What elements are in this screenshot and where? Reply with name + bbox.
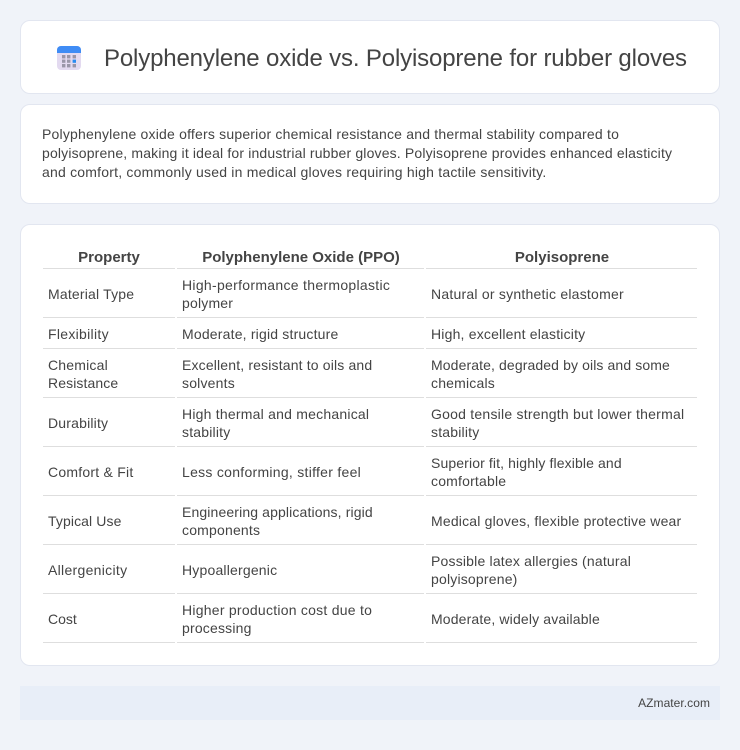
row: Material Type: polymer <box>182 295 233 311</box>
row: Chemical Resistance: Moderate, degraded by oils and some <box>431 357 670 373</box>
table header: Polyisoprene <box>515 249 609 266</box>
row: Typical Use <box>48 504 681 538</box>
row: Chemical Resistance: chemicals <box>431 375 495 391</box>
row: Flexibility: Flexibility <box>48 326 109 342</box>
row: Material Type <box>48 277 624 311</box>
row: Flexibility <box>48 326 586 342</box>
row: Typical Use: Engineering applications, rigid <box>182 504 373 520</box>
row: Durability: stability <box>431 424 479 440</box>
row: Durability: High thermal and mechanical <box>182 406 369 422</box>
row: Durability: stability <box>182 424 230 440</box>
row: Comfort & Fit: Superior fit, highly flexible and <box>431 455 622 471</box>
title: Polyphenylene oxide vs. Polyisoprene for rubber gloves <box>104 45 687 72</box>
row: Allergenicity: Allergenicity <box>48 562 127 578</box>
row: Chemical Resistance: Chemical <box>48 357 108 373</box>
row: Durability: Good tensile strength but lower thermal <box>431 406 684 422</box>
row: Chemical Resistance <box>48 357 670 391</box>
table header <box>78 249 609 266</box>
row: Comfort & Fit: comfortable <box>431 473 506 489</box>
intro text: polyisoprene, making it ideal for industrial rubber gloves. Polyisoprene provides enhanced elasticity <box>42 145 672 161</box>
row: Durability: Durability <box>48 415 108 431</box>
row: Material Type: High-performance thermoplastic <box>182 277 390 293</box>
footer bar <box>20 686 720 720</box>
intro text: Polyphenylene oxide offers superior chemical resistance and thermal stability compared to <box>42 126 619 142</box>
row: Material Type: Material Type <box>48 286 134 302</box>
intro text <box>42 126 672 180</box>
row: Allergenicity: polyisoprene) <box>431 571 518 587</box>
row: Chemical Resistance: Resistance <box>48 375 118 391</box>
row: Durability <box>48 406 684 440</box>
row: Flexibility: Moderate, rigid structure <box>182 326 338 342</box>
row: Cost: Cost <box>48 611 77 627</box>
row: Allergenicity: Hypoallergenic <box>182 562 277 578</box>
row: Allergenicity: Possible latex allergies (natural <box>431 553 631 569</box>
icon: calendar grid <box>57 46 81 70</box>
footer credit: AZmater.com <box>638 696 710 710</box>
row: Cost: Moderate, widely available <box>431 611 600 627</box>
comparison table <box>43 249 697 643</box>
title panel <box>20 20 720 94</box>
row: Comfort & Fit <box>48 455 622 489</box>
table header: Polyphenylene Oxide (PPO) <box>202 249 400 266</box>
table header: Property <box>78 249 140 266</box>
intro text: and comfort, commonly used in medical gloves requiring high tactile sensitivity. <box>42 164 546 180</box>
row: Typical Use: Medical gloves, flexible protective wear <box>431 513 681 529</box>
row: Typical Use: Typical Use <box>48 513 121 529</box>
row: Chemical Resistance: solvents <box>182 375 235 391</box>
row: Material Type: Natural or synthetic elastomer <box>431 286 624 302</box>
row: Flexibility: High, excellent elasticity <box>431 326 585 342</box>
row: Cost: processing <box>182 620 252 636</box>
row: Cost <box>48 602 600 636</box>
row: Comfort & Fit: Less conforming, stiffer feel <box>182 464 361 480</box>
row: Cost: Higher production cost due to <box>182 602 372 618</box>
row: Comfort & Fit: Comfort & Fit <box>48 464 133 480</box>
row: Typical Use: components <box>182 522 260 538</box>
intro text panel <box>20 104 720 204</box>
row: Chemical Resistance: Excellent, resistant to oils and <box>182 357 372 373</box>
row: Allergenicity <box>48 553 631 587</box>
comparison table panel <box>20 224 720 666</box>
